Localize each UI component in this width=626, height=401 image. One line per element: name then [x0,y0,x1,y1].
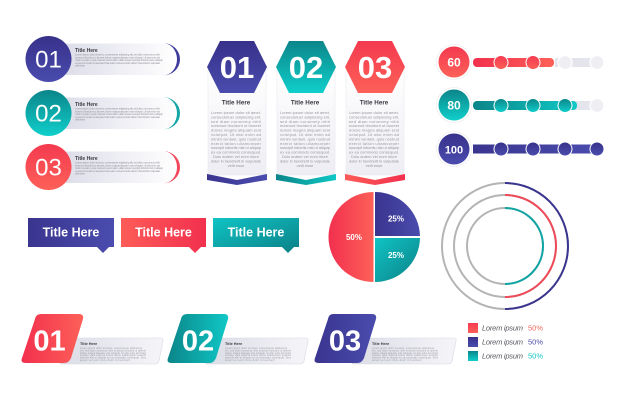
card 01: exerci tation ullamcorper [211,141,262,146]
legend row navy [468,337,543,347]
item 03: dolore magna aliquam erat volutpat. Ut wisi enim ad minim [372,352,438,355]
slider 100 [436,132,604,166]
pill 01: ex ea commodo consequat. Duis autem vel eum iriure dolor in hendrerit in vulputate [75,61,160,65]
item 01: autem vel eum iriure dolor in hendrerit [80,359,130,362]
item 01: dolore magna aliquam erat volutpat. Ut wisi enim ad minim [80,352,146,355]
card 02: volutpat. Ut wisi enim ad [280,132,330,137]
card 01: suscipit lobortis nisl ut aliquip [211,145,262,150]
card 01 [207,41,267,185]
card 01: dolor in hendrerit in vulputate [211,158,262,163]
item 03: elit, sed diam nonummy nibh euismod tincidunt ut laoreet [372,349,438,352]
banner teal: Title Here [228,226,284,240]
legend row teal: 50% [528,352,543,360]
slider 80 [436,88,604,122]
pill 03: Lorem ipsum dolor sit amet, consectetuer adipiscing elit, sed diam nonummy nibh [75,160,160,164]
banner red: Title Here [135,226,192,240]
card 02: suscipit lobortis nisl ut aliquip [280,145,331,150]
card 03: Lorem ipsum dolor sit amet, [349,110,399,115]
pill 01: euismod tincidunt ut laoreet dolore magna aliquam erat volutpat. Ut wisi enim ad [75,55,160,59]
item 02: dolore magna aliquam erat volutpat. Ut wisi enim ad minim [225,352,291,355]
pie chart: 25% [388,214,404,224]
card 03: exerci tation ullamcorper [349,141,400,146]
card 01: Lorem ipsum dolor sit amet, [211,110,261,115]
panel: hexagon cards [207,41,405,185]
slider 60 [436,44,604,80]
item 03 [314,314,456,364]
card 03: dolore magna aliquam erat [349,128,400,133]
pill 01: Lorem ipsum dolor sit amet, consectetuer adipiscing elit, sed diam nonummy nibh [75,52,160,56]
slider 60: 60 [447,56,461,70]
panel: progress sliders [436,44,604,166]
banner teal [213,218,299,253]
item 02: 02 [182,326,214,358]
card 02: sed diam nonummy nibh [280,119,330,124]
pill 01: minim veniam, quis nostrud exerci tation ullamcorper suscipit lobortis nisl ut aliquip [75,58,163,62]
pill 02: minim veniam, quis nostrud exerci tation ullamcorper suscipit lobortis nisl ut aliquip [75,112,163,116]
card 03: euismod tincidunt ut laoreet [349,123,400,128]
legend row red [468,323,543,333]
card 02: dolor in hendrerit in vulputate [280,158,331,163]
item 01: Lorem ipsum dolor sit amet, consectetuer adipiscing [80,347,143,350]
card 02: euismod tincidunt ut laoreet [280,123,331,128]
banner navy: Title Here [43,226,99,240]
card 02: exerci tation ullamcorper [280,141,331,146]
card 02: minim veniam, quis nostrud [280,136,330,141]
legend row red: 50% [528,324,543,332]
pill 01: Title Here [75,48,98,54]
pill 02: velit esse [75,118,85,122]
legend [468,323,543,361]
item 01: lobortis nisl ut aliquip ex ea commodo consequat. Duis [80,357,147,360]
card 01: consectetuer adipiscing elit, [211,114,261,119]
legend row red: Lorem ipsum [482,324,523,332]
pill 03: ex ea commodo consequat. Duis autem vel eum iriure dolor in hendrerit in vulputate [75,169,160,173]
card 03: Duis autem vel eum iriure [351,154,398,159]
slider 100: 100 [445,144,463,156]
slider 80: 80 [447,98,461,112]
card 03: Title Here [360,100,389,106]
item 01: Title Here [80,342,97,346]
card 03: consectetuer adipiscing elit, [349,114,399,119]
card 03: sed diam nonummy nibh [349,119,399,124]
item 01: veniam, quis nostrud exerci tation ullamcorper suscipit [80,354,146,357]
pie chart [328,192,420,282]
card 02: consectetuer adipiscing elit, [280,114,330,119]
card 01: Duis autem vel eum iriure [213,154,260,159]
card 01: minim veniam, quis nostrud [211,136,261,141]
item 01: 01 [33,326,66,358]
banner red [121,218,206,253]
card 01: euismod tincidunt ut laoreet [211,123,262,128]
item 03: 03 [329,326,361,358]
pill 01 [26,36,180,82]
pie chart: 50% [346,233,362,242]
pie chart: 25% [388,251,404,260]
card 02: Duis autem vel eum iriure [282,154,329,159]
item 02: Title Here [225,342,242,346]
pill 03: Title Here [75,156,98,162]
item 03: veniam, quis nostrud exerci tation ullamcorper suscipit [372,354,438,357]
item 02: veniam, quis nostrud exerci tation ullamcorper suscipit [225,354,291,357]
pill 01: 01 [35,46,62,74]
card 02: ex ea commodo consequat. [280,150,330,155]
item 03: Title Here [372,342,389,346]
card 01: velit esse [228,163,245,168]
card 03: suscipit lobortis nisl ut aliquip [349,145,400,150]
card 03: 03 [358,50,392,85]
panel: parallelogram list [22,314,456,364]
item 01 [22,314,163,364]
card 02: dolore magna aliquam erat [280,128,331,133]
item 02: autem vel eum iriure dolor in hendrerit [225,359,275,362]
legend row teal [468,351,543,361]
banner navy [28,218,114,253]
item 02: lobortis nisl ut aliquip ex ea commodo consequat. Duis [225,357,292,360]
legend row navy: 50% [528,338,543,346]
card 01: 01 [220,50,254,85]
card 01: volutpat. Ut wisi enim ad [211,132,261,137]
item 02: elit, sed diam nonummy nibh euismod tincidunt ut laoreet [225,349,291,352]
card 03: dolor in hendrerit in vulputate [349,158,400,163]
card 02: Title Here [291,100,320,106]
legend row navy: Lorem ipsum [482,338,523,346]
item 02: Lorem ipsum dolor sit amet, consectetuer adipiscing [225,347,288,350]
item 03: lobortis nisl ut aliquip ex ea commodo consequat. Duis [372,357,439,360]
pill 03: minim veniam, quis nostrud exerci tation ullamcorper suscipit lobortis nisl ut aliquip [75,166,163,170]
card 03: volutpat. Ut wisi enim ad [349,132,399,137]
pill 01: velit esse [75,64,85,68]
card 01: Title Here [222,100,251,106]
card 01: sed diam nonummy nibh [211,119,261,124]
pill 02 [26,90,180,136]
pill 02: euismod tincidunt ut laoreet dolore magna aliquam erat volutpat. Ut wisi enim ad [75,109,160,113]
pill 02: Title Here [75,102,98,108]
pill 03: velit esse [75,172,85,176]
pill 03 [26,144,180,190]
legend row teal: Lorem ipsum [482,352,523,360]
pill 02: Lorem ipsum dolor sit amet, consectetuer adipiscing elit, sed diam nonummy nibh [75,106,160,110]
pill 03: 03 [35,154,62,182]
card 02: 02 [289,50,323,85]
pill 03: euismod tincidunt ut laoreet dolore magna aliquam erat volutpat. Ut wisi enim ad [75,163,160,167]
item 03: autem vel eum iriure dolor in hendrerit [372,359,422,362]
card 02: Lorem ipsum dolor sit amet, [280,110,330,115]
concentric ring chart [442,183,568,309]
card 02 [276,41,336,185]
card 02: velit esse [297,163,314,168]
card 03: velit esse [366,163,383,168]
card 01: dolore magna aliquam erat [211,128,262,133]
item 02 [168,314,308,364]
card 01: ex ea commodo consequat. [211,150,261,155]
panel: title banners [28,218,299,253]
panel: numbered pill list [26,36,180,190]
item 03: Lorem ipsum dolor sit amet, consectetuer adipiscing [372,347,435,350]
card 03 [345,41,405,185]
card 03: minim veniam, quis nostrud [349,136,399,141]
item 01: elit, sed diam nonummy nibh euismod tincidunt ut laoreet [80,349,146,352]
pill 02: ex ea commodo consequat. Duis autem vel eum iriure dolor in hendrerit in vulputate [75,115,160,119]
card 03: ex ea commodo consequat. [349,150,399,155]
pill 02: 02 [35,100,62,128]
